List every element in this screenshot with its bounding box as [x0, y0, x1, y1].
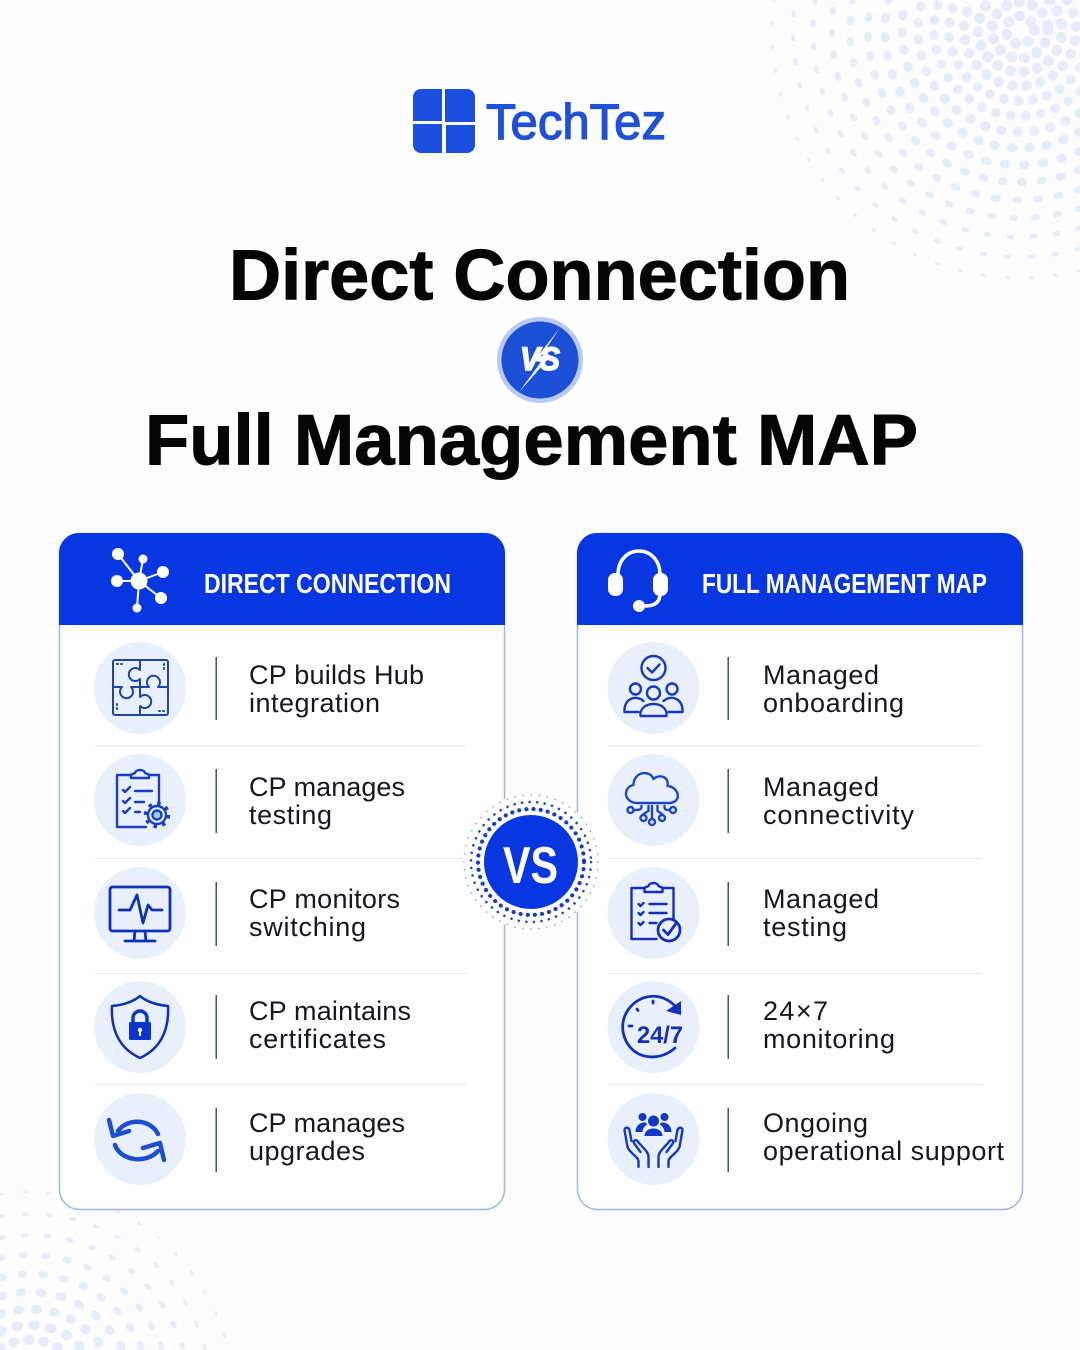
row 5	[608, 1093, 1004, 1185]
title line 2: Full Management MAP	[145, 402, 918, 480]
icon: shield lock	[112, 996, 168, 1058]
row 5: Ongoing	[763, 1108, 868, 1138]
logo: TechTez	[413, 89, 666, 153]
row 2	[608, 754, 914, 846]
logo mark	[413, 89, 475, 153]
icon: headset	[608, 551, 668, 612]
row 2: connectivity	[763, 800, 914, 830]
icon: hands with people	[624, 1113, 682, 1167]
icon: 24/7 clock: 24/7	[637, 1022, 683, 1049]
row 4: certificates	[249, 1024, 386, 1054]
vs badge: VS	[520, 341, 561, 377]
row 3: testing	[763, 912, 847, 942]
icon: monitor	[110, 887, 170, 941]
row 4	[608, 981, 895, 1073]
icon: clipboard check	[632, 883, 680, 941]
row 1: onboarding	[763, 688, 904, 718]
row 1: Managed	[763, 660, 879, 690]
row 1: CP builds Hub	[249, 660, 424, 690]
row 2	[94, 754, 405, 846]
vs badge	[497, 317, 583, 403]
icon: puzzle	[113, 660, 168, 715]
center vs badge	[463, 794, 599, 930]
row 1: integration	[249, 688, 380, 718]
row 3: Managed	[763, 884, 879, 914]
row 5: operational support	[763, 1136, 1004, 1166]
center vs badge: VS	[503, 837, 558, 895]
row 4: 24×7	[763, 996, 828, 1026]
panel body	[578, 534, 1022, 1210]
icon: refresh	[109, 1120, 164, 1160]
row 4	[94, 981, 411, 1073]
panel: direct connection	[59, 533, 505, 1210]
halftone pattern: top right	[772, 0, 1080, 278]
title line 1: Direct Connection	[229, 236, 850, 316]
icon: onboarding people	[624, 656, 683, 716]
halftone pattern: bottom left	[0, 1192, 228, 1350]
row 2: CP manages	[249, 772, 405, 802]
row 3: switching	[249, 912, 366, 942]
row 4: CP maintains	[249, 996, 411, 1026]
row 5	[94, 1093, 405, 1185]
row 3	[608, 867, 879, 959]
row 4: monitoring	[763, 1024, 895, 1054]
panel header	[59, 533, 505, 625]
icon: cloud circuit	[626, 773, 678, 825]
row 1	[94, 642, 424, 734]
icon: 24/7 clock	[623, 996, 683, 1057]
header label: FULL MANAGEMENT MAP	[702, 568, 987, 599]
panel header	[577, 533, 1023, 625]
icon: clipboard with gear	[117, 770, 168, 827]
row 2: testing	[249, 800, 332, 830]
row 1	[608, 642, 904, 734]
icon: network	[111, 548, 169, 612]
logo wordmark: TechTez	[486, 94, 666, 150]
row 5: upgrades	[249, 1136, 365, 1166]
row 5: CP manages	[249, 1108, 405, 1138]
row 3	[94, 867, 400, 959]
panel: full management map	[577, 533, 1023, 1210]
row 2: Managed	[763, 772, 879, 802]
header label: DIRECT CONNECTION	[204, 568, 451, 599]
panel body	[60, 534, 504, 1210]
row 3: CP monitors	[249, 884, 400, 914]
